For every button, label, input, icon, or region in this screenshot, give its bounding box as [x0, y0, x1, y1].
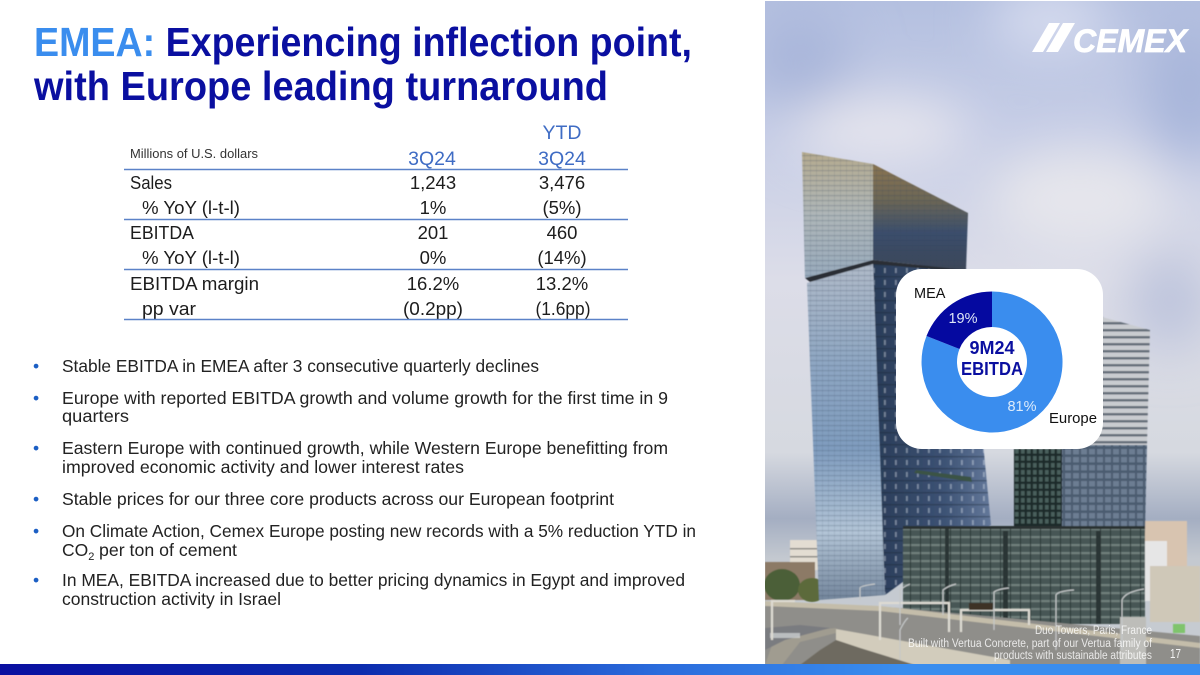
bullet 5: CO [62, 540, 88, 560]
logo: Cemex: CEMEX [1073, 23, 1189, 59]
table column headers: 3Q24 [538, 148, 586, 170]
bullet 2: Europe with reported EBITDA growth and volume growth for the first time in 9 [62, 388, 668, 408]
bullet 5: per ton of cement [99, 540, 237, 560]
bullet list [33, 356, 696, 609]
bullet 2 [33, 388, 668, 426]
bullet 2: • [33, 388, 39, 408]
table rows: 3,476 [539, 172, 585, 193]
table rows [130, 172, 590, 319]
table rows: 0% [420, 247, 446, 268]
table column headers: 3Q24 [408, 148, 456, 170]
donut centre label: EBITDA [961, 359, 1023, 379]
photo caption: Duo Towers, Paris, France [1035, 625, 1152, 637]
table rows: 1% [420, 197, 446, 218]
bullet 4: • [33, 489, 39, 509]
table rows: (14%) [537, 247, 587, 268]
table column headers [130, 122, 586, 170]
street lamps [860, 584, 1144, 660]
table column headers: YTD [542, 122, 582, 144]
donut chart: 81% [1007, 399, 1037, 415]
table rows: 16.2% [407, 273, 459, 294]
table rows: Sales [130, 172, 172, 193]
distant buildings [790, 540, 820, 570]
bullet 3: Eastern Europe with continued growth, while Western Europe benefitting from [62, 438, 668, 458]
page number: 17 [1170, 646, 1181, 661]
donut centre label: 9M24 [969, 338, 1015, 358]
right tower [1062, 300, 1150, 445]
bullet 6 [33, 570, 685, 609]
bullet 4: Stable prices for our three core products across our European footprint [62, 489, 614, 509]
bullet 5: 2 [88, 551, 94, 563]
table rows: 460 [547, 222, 577, 243]
donut chart [922, 292, 1063, 433]
table rows: 201 [418, 222, 448, 243]
photo caption: Built with Vertua Concrete, part of our Vertua family of [908, 638, 1153, 650]
bullet 6: In MEA, EBITDA increased due to better pricing dynamics in Egypt and improved [62, 570, 685, 590]
donut chart: 19% [948, 311, 978, 327]
bullet 5: • [33, 521, 39, 541]
donut centre label [961, 338, 1023, 379]
bullet 3 [33, 438, 668, 477]
table rows: % YoY (l-t-l) [142, 197, 240, 218]
table rows: EBITDA margin [130, 273, 259, 294]
low glass building [903, 528, 1145, 624]
top cube [802, 152, 873, 278]
highway gantries [772, 601, 1029, 640]
photo: Duo Towers, Paris [750, 0, 1200, 665]
label: Europe: Europe [1049, 411, 1097, 427]
bullet 5 [33, 521, 696, 563]
bottom gradient bar [0, 664, 1200, 675]
title [33, 19, 692, 109]
photo caption [908, 625, 1153, 662]
bullet 1: Stable EBITDA in EMEA after 3 consecutive quarterly declines [62, 356, 539, 376]
table rows: EBITDA [130, 222, 195, 243]
bullet 3: • [33, 438, 39, 458]
bullet 6: • [33, 570, 39, 590]
left tower [807, 262, 885, 600]
bullet 2: quarters [62, 406, 129, 426]
table rows: (1.6pp) [536, 298, 590, 319]
table rows: pp var [142, 298, 196, 319]
title line 2: with Europe leading turnaround [33, 63, 608, 109]
road [765, 603, 1200, 665]
label: MEA: MEA [914, 286, 946, 302]
bullet 1: • [33, 356, 39, 376]
photo caption: products with sustainable attributes [994, 650, 1152, 662]
table rows: % YoY (l-t-l) [142, 247, 240, 268]
bullet 3: improved economic activity and lower interest rates [62, 457, 464, 477]
bullet 5: On Climate Action, Cemex Europe posting new records with a 5% reduction YTD in [62, 521, 696, 541]
table rows: 1,243 [410, 172, 456, 193]
table column headers: Millions of U.S. dollars [130, 146, 258, 161]
table rows: (0.2pp) [403, 298, 463, 319]
panel: donut chart card [896, 269, 1103, 449]
table rows: (5%) [542, 197, 582, 218]
title line 1: EMEA: Experiencing inflection point, [34, 19, 692, 65]
bullet 6: construction activity in Israel [62, 589, 281, 609]
financial table [124, 122, 628, 320]
table rows: 13.2% [536, 273, 588, 294]
